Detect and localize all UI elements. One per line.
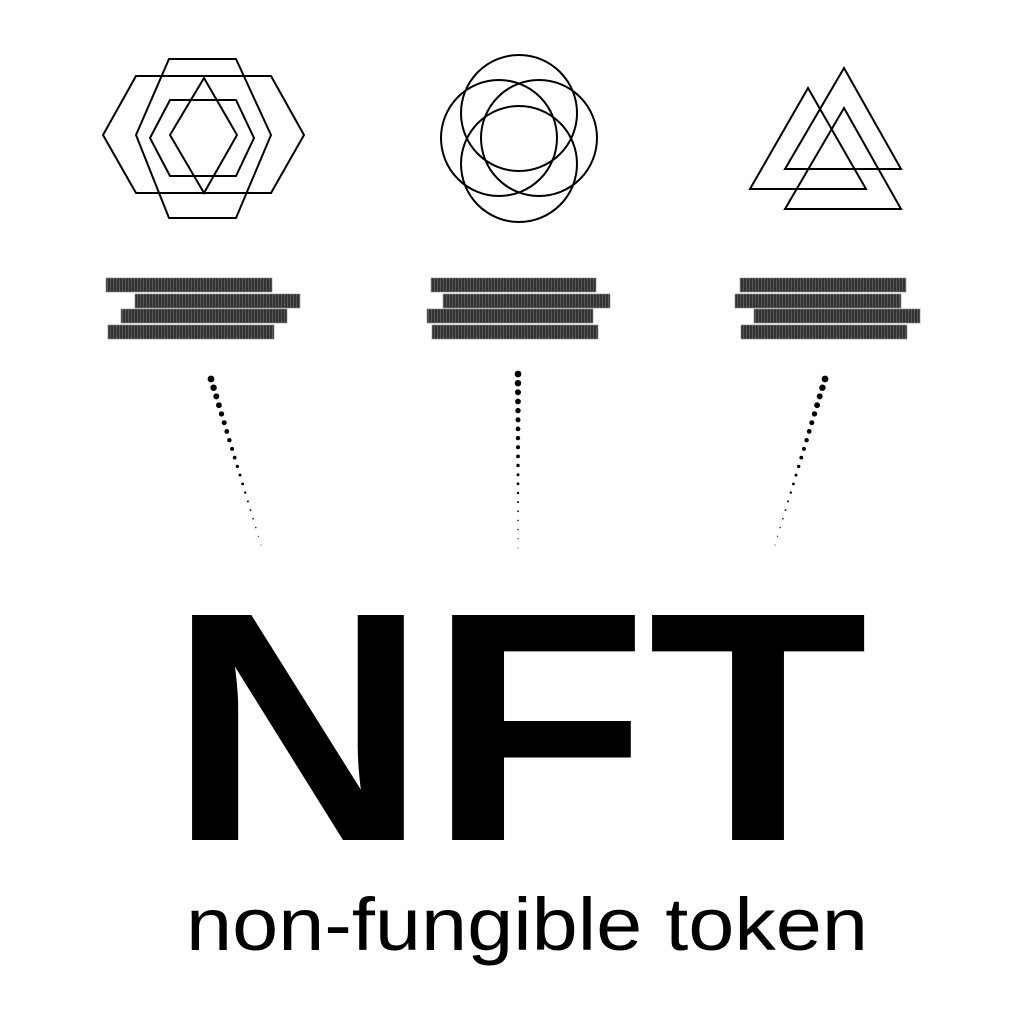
dotted arrow right [774,376,828,546]
icon: triangles [750,68,901,209]
coin stack right [735,278,920,339]
dotted arrow left [208,376,262,546]
icon: hexagons [103,59,304,218]
coin stack left [106,278,300,339]
icon: circles [441,55,597,222]
dotted arrow middle [515,371,521,548]
title: NFT: NFT [168,545,868,910]
subtitle: non-fungible token [186,883,868,966]
coin stack middle [427,278,610,339]
